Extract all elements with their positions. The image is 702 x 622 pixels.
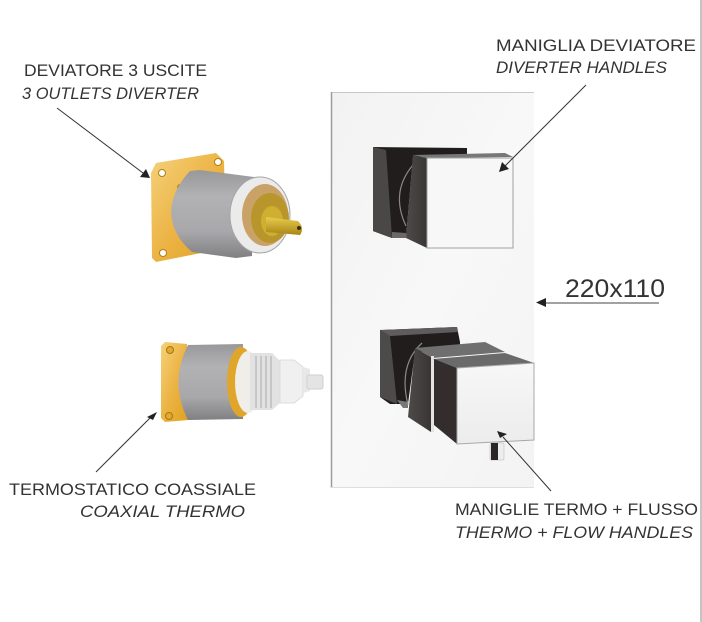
- arrow: dimension leader: [536, 298, 659, 307]
- page right edge line: [700, 0, 702, 622]
- icon: 3 outlets diverter cartridge: [151, 153, 302, 262]
- heading: thermo and flow handles label: [455, 500, 698, 542]
- arrow: to diverter handle: [499, 85, 586, 172]
- arrow: to thermo and flow handles: [497, 431, 551, 491]
- heading: coaxial thermo label: COAXIAL THERMO: [80, 502, 245, 521]
- heading: diverter handles label: DIVERTER HANDLES: [496, 58, 668, 77]
- dimension label: 220x110: 220x110: [565, 275, 665, 303]
- heading: thermo and flow handles label: MANIGLIE TERMO + FLUSSO: [455, 500, 698, 519]
- heading: coaxial thermo label: TERMOSTATICO COASSIALE: [9, 480, 256, 499]
- heading: 3 outlets diverter label: 3 OUTLETS DIVERTER: [22, 84, 199, 103]
- arrow: to thermo cartridge: [96, 412, 157, 472]
- icon: coaxial thermostatic cartridge: [161, 342, 323, 422]
- icon: upper diverter handle: [373, 147, 513, 248]
- icon: lower thermo and flow handles: [380, 327, 534, 460]
- panel: wall plate: [331, 92, 534, 488]
- heading: diverter handles label: [496, 36, 696, 77]
- heading: 3 outlets diverter label: DEVIATORE 3 USCITE: [24, 61, 207, 80]
- heading: diverter handles label: MANIGLIA DEVIATORE: [496, 36, 696, 55]
- heading: coaxial thermo label: [9, 480, 256, 521]
- arrow: to diverter cartridge: [57, 108, 150, 178]
- heading: 3 outlets diverter label: [22, 61, 207, 103]
- heading: thermo and flow handles label: THERMO + FLOW HANDLES: [455, 523, 694, 542]
